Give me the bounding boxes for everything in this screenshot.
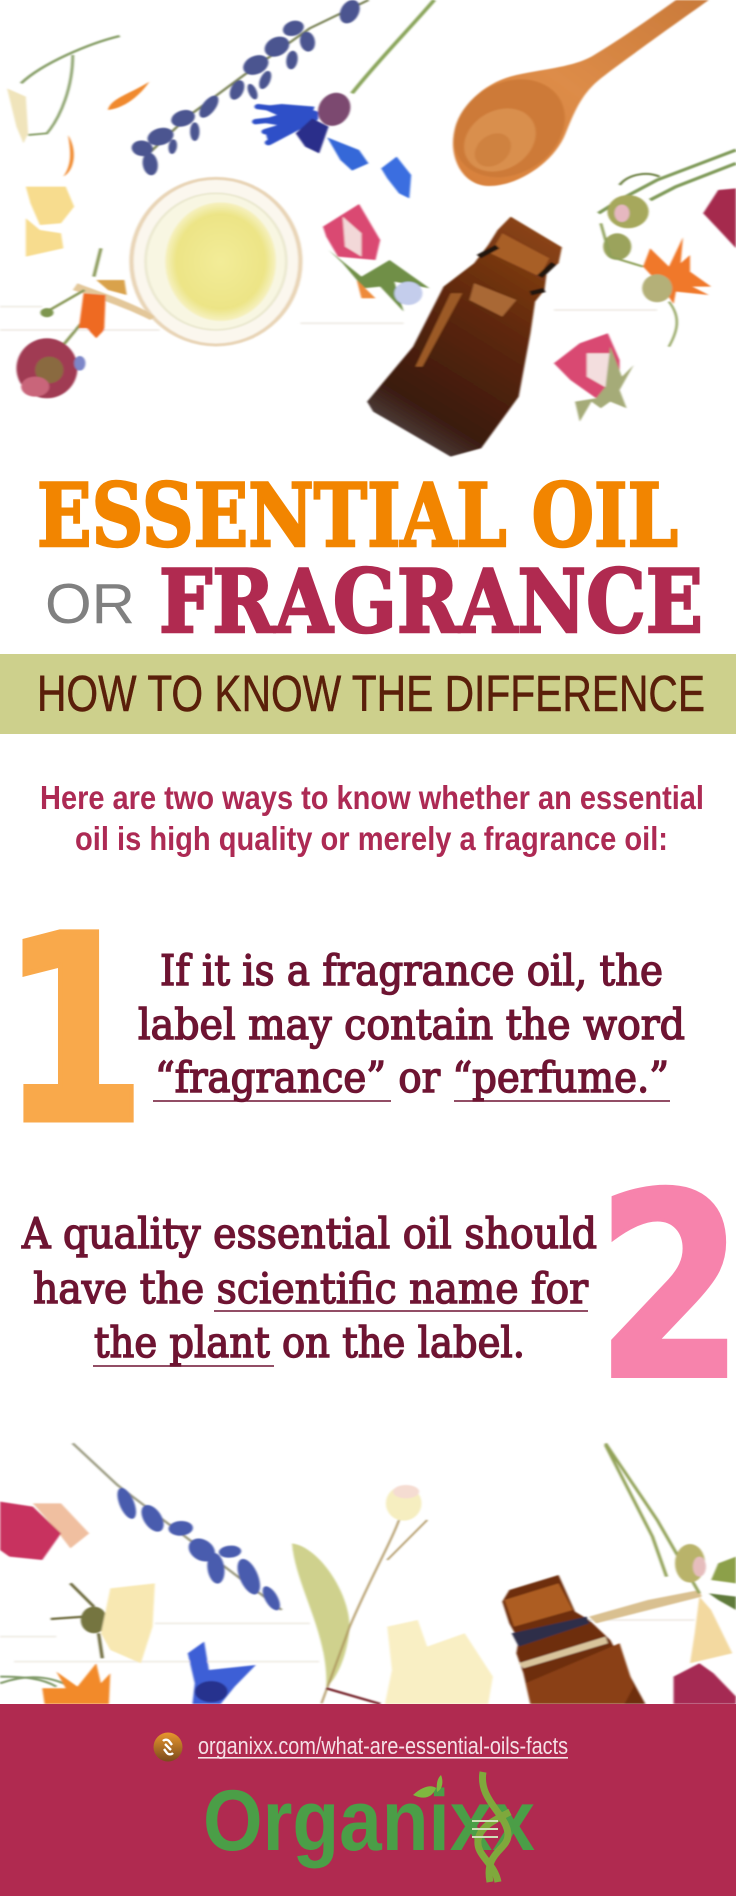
cornflower: [256, 0, 434, 198]
wooden spoon: [434, 0, 709, 189]
point 1 text: If it is a fragrance oil, the: [160, 946, 663, 995]
cream petals: [385, 1620, 493, 1704]
cream petal: [690, 1597, 732, 1663]
rose stems and buds: [606, 1443, 736, 1610]
blue cornflower: [188, 1642, 256, 1704]
point 2 text: have the scientific name for: [33, 1264, 589, 1313]
wood streaks: [0, 307, 657, 330]
maroon petal: [674, 1663, 736, 1704]
orange marigold: [642, 237, 711, 347]
photo: top flat lay of flowers, oil bowl, spoon and bottle: [0, 0, 736, 457]
point 1 text: [138, 946, 685, 1102]
icon: link: [154, 1732, 182, 1762]
brown twig: [326, 1688, 380, 1704]
cream flower with stem: [51, 1583, 155, 1663]
pink rose bud: [323, 204, 430, 312]
white wildflower on stem: [322, 1485, 427, 1703]
intro text: oil is high quality or merely a fragrance oil:: [75, 820, 668, 857]
lavender sprig: [128, 0, 368, 176]
amber bottle: [367, 217, 562, 457]
point 2 text: the plant on the label.: [94, 1318, 525, 1367]
amber bottle with twine: [502, 1575, 702, 1704]
orange marigold: [0, 1663, 110, 1704]
numeral 1: 1: [1, 881, 146, 1181]
point 2 text: [21, 1209, 597, 1367]
orange flower with stem: [40, 248, 127, 345]
logo: Organixx: [203, 1773, 535, 1869]
lavender sprig: [73, 1443, 284, 1612]
orange petals: [63, 82, 149, 177]
yellow petals: [26, 187, 74, 257]
logo helix: [472, 1772, 510, 1882]
photo: bottom flat lay of flowers and bottle: [0, 1443, 736, 1704]
logo leaf: [413, 1775, 442, 1798]
point 1 text: label may contain the word: [138, 1000, 685, 1049]
oil bowl with rope: [73, 178, 300, 345]
source link: organixx.com/what-are-essential-oils-facts: [198, 1733, 568, 1760]
wood streaks: [0, 1620, 695, 1662]
white sprig: [7, 36, 120, 143]
footer band: [0, 1704, 736, 1896]
subtitle banner: [0, 654, 736, 734]
point 2 text: A quality essential oil should: [21, 1209, 597, 1258]
title: or: OR: [45, 572, 135, 636]
green leaf: [292, 1543, 350, 1687]
intro text: [40, 779, 704, 857]
clover blossom: [16, 338, 85, 398]
rose stems and buds on right: [598, 150, 736, 267]
pink flower lower right: [554, 333, 634, 422]
point 1 text: “fragrance” or “perfume.”: [155, 1053, 669, 1102]
maroon petal: [703, 188, 736, 248]
pink petal: [0, 1502, 89, 1560]
